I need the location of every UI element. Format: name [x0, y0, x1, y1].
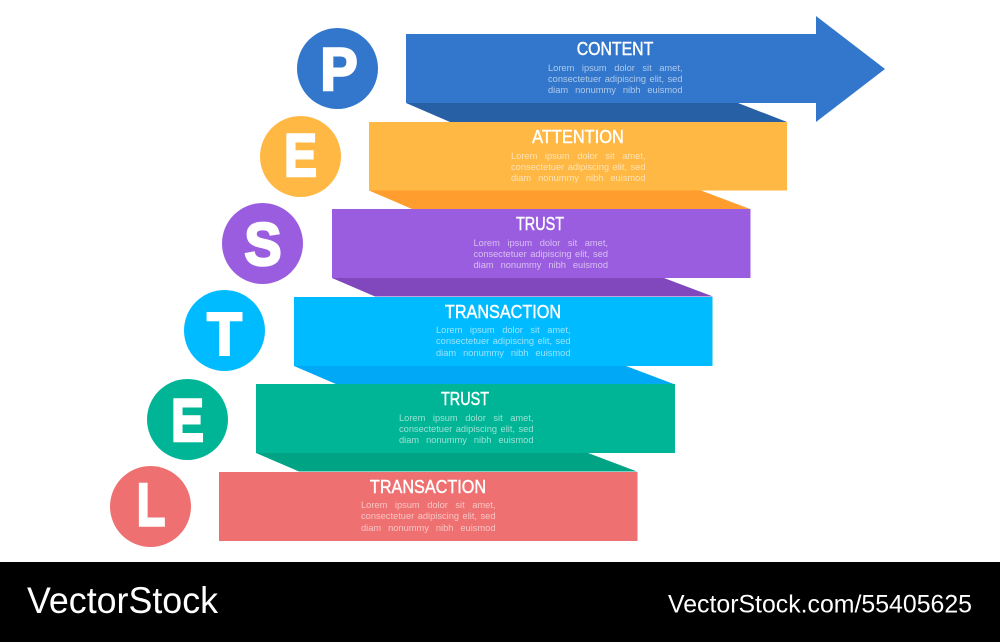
panel: second transaction band: [219, 472, 638, 541]
text block: content: Lorem ipsum dolor sit amet,: [548, 62, 682, 72]
text block: second transaction: Lorem ipsum dolor sit amet,: [361, 500, 496, 510]
text block: transaction: Lorem ipsum dolor sit amet,: [436, 325, 570, 335]
text block: attention: Lorem ipsum dolor sit amet,: [511, 150, 646, 160]
text block: transaction: [436, 325, 570, 358]
icon: letter S circle: S: [244, 212, 282, 278]
icon: letter T circle: T: [207, 302, 242, 369]
text block: content: consectetuer adipiscing elit, sed: [548, 74, 682, 84]
text block: second trust: [399, 412, 534, 445]
text block: attention: [511, 150, 646, 183]
text block: attention: consectetuer adipiscing elit, sed: [511, 162, 646, 172]
icon: letter L circle: L: [136, 472, 165, 539]
text block: attention: diam nonummy nibh euismod: [511, 173, 646, 183]
text block: content: [548, 62, 682, 95]
icon: letter P circle: [297, 28, 378, 109]
brand name: VectorStock: [27, 580, 218, 621]
text block: trust: [474, 238, 608, 270]
icon: letter E circle: [260, 116, 341, 197]
text block: second trust: diam nonummy nibh euismod: [399, 435, 534, 445]
icon: letter T circle: [184, 290, 265, 371]
heading: second transaction: TRANSACTION: [369, 476, 486, 496]
panel: second trust band: [256, 384, 675, 472]
icon: letter E circle: E: [284, 121, 316, 189]
icon: letter P circle: P: [320, 37, 358, 103]
footer: watermark bar: [0, 562, 1000, 642]
icon: letter S circle: [222, 203, 303, 284]
text block: transaction: consectetuer adipiscing elit, sed: [436, 336, 570, 346]
text block: trust: Lorem ipsum dolor sit amet,: [474, 238, 608, 248]
icon: letter L circle: [110, 466, 191, 547]
heading: content: CONTENT: [576, 39, 653, 59]
text block: second transaction: consectetuer adipiscing elit, sed: [361, 511, 496, 521]
text block: trust: consectetuer adipiscing elit, sed: [474, 249, 608, 259]
text block: second trust: consectetuer adipiscing elit, sed: [399, 424, 534, 434]
text block: second trust: Lorem ipsum dolor sit amet,: [399, 412, 534, 422]
text block: content: diam nonummy nibh euismod: [548, 85, 682, 95]
icon: second letter E circle: [147, 379, 228, 460]
panel: attention band: [369, 122, 787, 209]
text block: trust: diam nonummy nibh euismod: [474, 260, 608, 270]
panel: trust band: [332, 209, 750, 296]
panel: content arrow: [406, 16, 885, 122]
heading: transaction: TRANSACTION: [444, 302, 561, 322]
image url: VectorStock.com/55405625: [668, 590, 972, 618]
text block: transaction: diam nonummy nibh euismod: [436, 348, 570, 358]
heading: trust: TRUST: [516, 214, 564, 234]
text block: second transaction: diam nonummy nibh euismod: [361, 523, 496, 533]
heading: attention: ATTENTION: [532, 127, 623, 147]
panel: transaction band: [294, 297, 712, 384]
text block: second transaction: [361, 500, 496, 533]
heading: second trust: TRUST: [441, 389, 489, 409]
icon: second letter E circle: E: [171, 386, 204, 454]
